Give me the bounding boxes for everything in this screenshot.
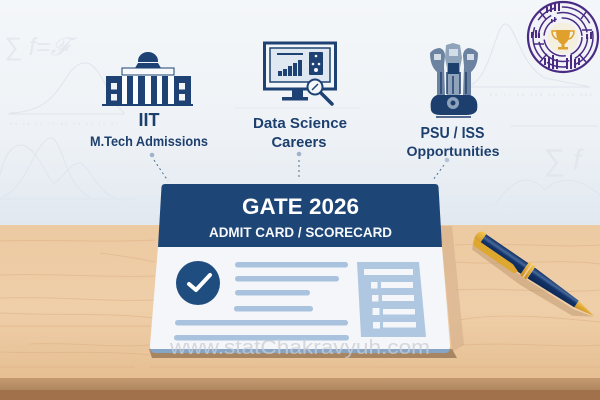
pen shadow: [468, 237, 593, 329]
pen barrel: [476, 233, 528, 274]
side lion right: [463, 48, 478, 95]
icon: monitor with magnifier: [264, 43, 336, 104]
formula: sigma top left: ∑ f=𝓕: [4, 33, 77, 61]
label: Data Science: Data Science: [253, 115, 347, 132]
axis numbers left: 50 65 60 72 81 94 95 19 97: [10, 121, 119, 126]
axis numbers right: 60 77 28 116 19 199 300: [490, 92, 593, 97]
icon: national emblem: [430, 43, 478, 117]
connector: right: [433, 158, 449, 180]
bell curve top left: [10, 63, 124, 113]
card header: [158, 184, 442, 247]
icon: institute building: [102, 52, 193, 106]
label: IIT: IIT: [138, 110, 160, 130]
pen tip: [574, 301, 596, 319]
check icon: [176, 261, 220, 305]
top right baseline: [470, 86, 590, 88]
curve lower right: [495, 180, 600, 205]
centre divider: [235, 107, 360, 109]
sigma lower right: ∑ f: [543, 144, 584, 177]
pen cap end: [472, 229, 486, 245]
pen: [467, 229, 598, 329]
arrow line right: [511, 125, 598, 127]
table: [0, 225, 600, 400]
background wall: [0, 0, 600, 226]
table top: [0, 225, 600, 378]
label: Opportunities: Opportunities: [406, 143, 500, 159]
pen clip: [471, 238, 520, 274]
connector: middle: [297, 152, 301, 179]
text lines: [174, 262, 349, 340]
watermark url: www.statChakravyuh.com: [169, 337, 430, 359]
faint statistics background: [0, 24, 600, 205]
table front edge: [0, 378, 600, 390]
lion details: [434, 49, 474, 60]
double curves lower left: [0, 138, 115, 198]
trophy: [548, 22, 578, 54]
subheading: ADMIT CARD / SCORECARD: [209, 224, 392, 240]
card shadow right on table: [440, 226, 464, 352]
table underside: [0, 390, 600, 400]
connector: left: [150, 153, 168, 181]
maze bars: [531, 3, 592, 69]
label: PSU / ISS: PSU / ISS: [420, 125, 484, 142]
pen ring: [520, 262, 532, 277]
side lion left: [430, 48, 445, 95]
lower left baseline: [0, 198, 135, 200]
centre lion: [445, 43, 462, 95]
label: Careers: Careers: [272, 134, 326, 151]
base: [431, 95, 477, 115]
checklist icon: [357, 262, 426, 337]
heading: GATE 2026: GATE 2026: [242, 194, 359, 219]
admit card: [150, 184, 450, 353]
wood grain: [0, 240, 600, 367]
card body: [150, 247, 450, 351]
label: M.Tech Admissions: M.Tech Admissions: [90, 134, 208, 149]
bell curve top right: [465, 24, 590, 87]
logo: maze with trophy: [528, 2, 598, 72]
bell curve baseline: [8, 113, 125, 115]
